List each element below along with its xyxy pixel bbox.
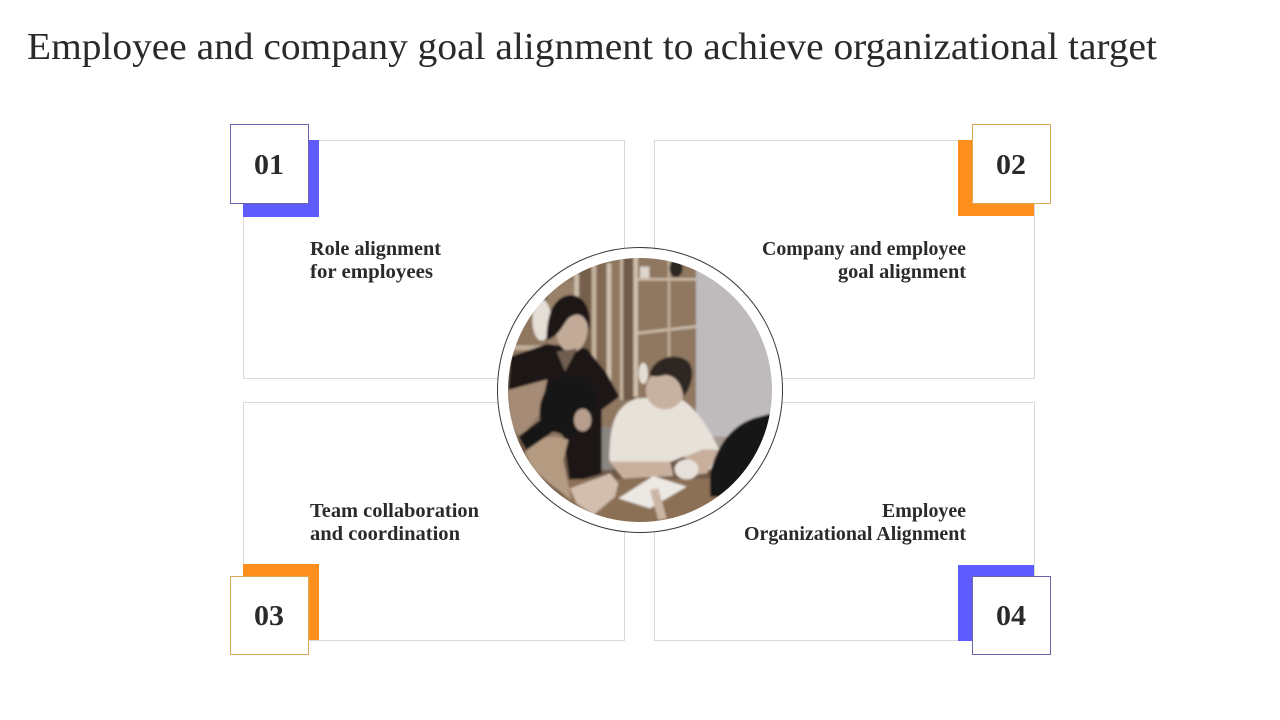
shelves — [578, 268, 592, 354]
label: employee organizational alignment: Employee — [882, 500, 966, 522]
accent: blue corner — [243, 140, 319, 217]
panel: 01 role alignment — [230, 124, 624, 378]
accent: blue corner — [958, 565, 1034, 641]
label: team collaboration — [310, 500, 479, 545]
number box 01 — [230, 124, 308, 204]
center ring — [498, 248, 782, 532]
number box 01: 01 — [254, 149, 284, 181]
number box 02: 02 — [996, 149, 1026, 181]
label: role alignment: Role alignment — [310, 238, 441, 260]
grey chair gap — [597, 427, 613, 470]
man — [609, 397, 720, 470]
woman in front — [525, 437, 572, 500]
photo: team meeting around a table — [508, 258, 772, 522]
panel: 02 company and employee goal alignment — [654, 124, 1050, 378]
label: employee organizational alignment: Organizational Alignment — [744, 523, 966, 545]
number box 03 — [230, 576, 308, 654]
number box 04 — [972, 576, 1050, 654]
label: team collaboration: Team collaboration — [310, 500, 479, 522]
accent: orange corner — [243, 564, 319, 640]
number box 03: 03 — [254, 600, 284, 632]
panel: 03 team collaboration — [230, 402, 624, 654]
label: company and employee goal alignment: goal alignment — [838, 261, 966, 283]
panel: 04 employee organizational alignment — [654, 402, 1050, 654]
number box 02 — [972, 124, 1050, 204]
woman standing — [508, 344, 619, 483]
label: team collaboration: and coordination — [310, 523, 460, 545]
label: role alignment — [310, 238, 441, 283]
person foreground right — [710, 413, 777, 497]
label: company and employee goal alignment — [762, 238, 966, 283]
cushion — [508, 379, 547, 437]
label: company and employee goal alignment: Company and employee — [762, 238, 966, 260]
number box 04: 04 — [996, 600, 1026, 632]
accent: orange corner — [958, 140, 1034, 216]
label: employee organizational alignment — [744, 500, 966, 545]
title: Employee and company goal alignment to achieve organizational target — [27, 26, 1157, 68]
label: role alignment: for employees — [310, 261, 433, 283]
table and notebook — [562, 477, 719, 522]
